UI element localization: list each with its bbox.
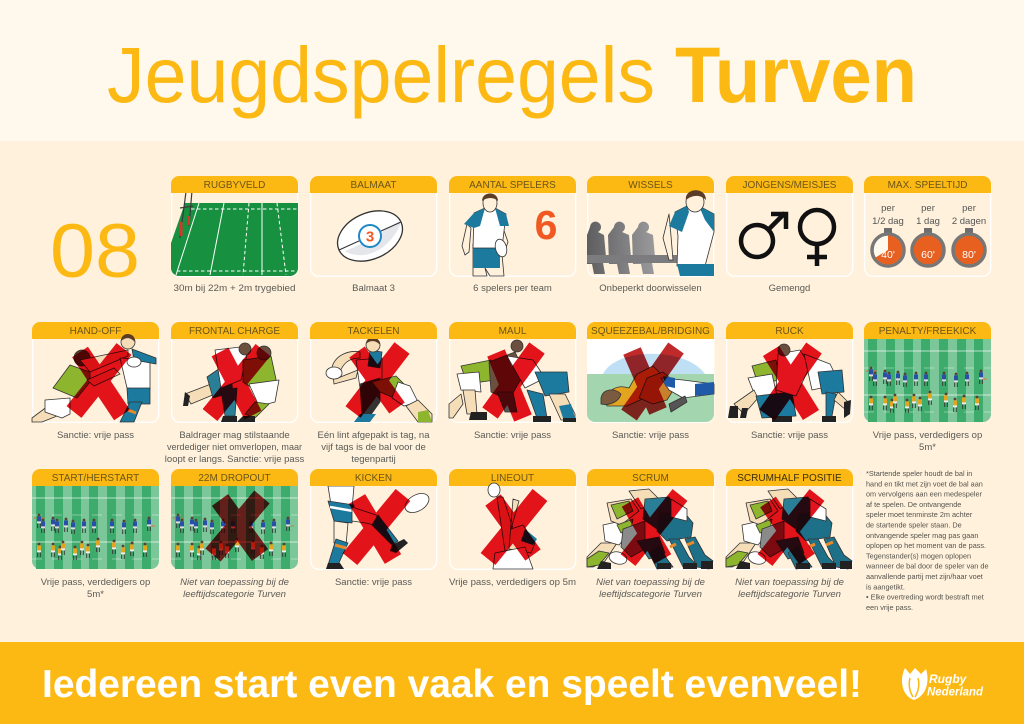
footnote text block: speler moet tenminste 2m achter [866,510,973,519]
footnote text block: oplopen op het moment van de pass. [866,541,986,550]
caption: tegenpartij [351,454,396,465]
panel: frontal charge: FRONTAL CHARGE [189,326,280,337]
caption [596,577,705,600]
player count: 6 [535,202,557,248]
panel: start/herstart [32,469,159,600]
caption: Sanctie: vrije pass [751,430,828,441]
panel: max. speeltijd: MAX. SPEELTIJD [888,180,967,191]
caption [318,430,430,465]
illustration: squeeze ball scene [587,339,714,422]
stopwatch: 80 minutes: 80' [962,249,976,261]
panel: squeezebal/bridging [587,322,714,441]
red cross [210,350,263,415]
caption: 6 spelers per team [473,283,552,294]
footnote text block [865,469,989,612]
red cross [765,495,817,560]
caption: Sanctie: vrije pass [335,577,412,588]
panel: ruck [726,322,853,441]
illustration: frontal charge players [183,343,279,422]
panel: kicken: KICKEN [355,473,392,484]
header [32,469,159,486]
stopwatch: 60 minutes: per [921,203,935,214]
caption: 30m bij 22m + 2m trygebied [174,283,296,294]
field with players [171,486,298,569]
red cross [488,495,540,559]
panel: scrum [587,469,714,600]
caption: Eén lint afgepakt is tag, na [318,430,430,441]
caption: vijf tags is de bal voor de [321,442,426,453]
panel: wissels [587,176,714,294]
footer band [0,642,1024,724]
panel: rugbyveld [171,176,298,294]
panel: 22m dropout [171,469,298,600]
icon: male symbol [741,213,786,257]
caption: Onbeperkt doorwisselen [599,283,702,294]
header [449,469,576,486]
stopwatch: 80 minutes: per [962,203,976,214]
stopwatch: 40 minutes: 40' [881,249,895,261]
caption: leeftijdscategorie Turven [599,589,702,600]
panel: tackelen [310,322,437,465]
footnote text block: *Startende speler houdt de bal in [866,469,972,478]
panel: maul: MAUL [499,326,527,337]
icon: substitutes bench and player [587,190,714,276]
age category number: 08 [50,209,140,294]
panel: aantal spelers: AANTAL SPELERS [469,180,556,191]
panel: balmaat: BALMAAT [351,180,396,191]
caption: 5m* [919,442,936,453]
illustration: ruck players [728,344,851,422]
illustration: kicking player [326,486,432,569]
stopwatch: 40 minutes: 1/2 dag [872,216,904,227]
red cross [213,497,262,555]
logo: Rugby Nederland: Rugby [929,672,968,686]
footnote text block: de startende speler staan. De [866,520,962,530]
caption [41,577,150,600]
panel: lineout [449,469,576,588]
illustration: tackle players [326,337,432,422]
icon: player with ball [462,194,509,276]
footnote text block: wanneer de bal door de speler van de [865,562,989,571]
panel: penalty/freekick: PENALTY/FREEKICK [879,326,977,337]
title: Turven [675,30,917,119]
caption: leeftijdscategorie Turven [183,589,286,600]
stopwatch: 80 minutes [952,203,986,266]
footnote text block: Tegenstander(s) mogen oplopen [866,551,971,560]
caption: Vrije pass, verdedigers op [41,577,150,588]
header [171,469,298,486]
header [587,176,714,193]
footer slogan: Iedereen start even vaak en speelt evenveel! [42,663,862,706]
header [171,176,298,193]
red cross [353,348,402,412]
caption: 5m* [87,589,104,600]
footnote text block: hand en tikt met zijn voet de bal aan [866,479,983,488]
header band [0,0,1024,141]
header [171,322,298,339]
panel: scrumhalf positie [726,469,853,600]
panel: kicken [310,469,437,588]
header [726,322,853,339]
panel: balmaat [310,176,437,294]
stopwatch: 80 minutes: 2 dagen [952,216,986,227]
red cross [350,495,403,559]
panel: maul [449,322,576,441]
caption: Niet van toepassing bij de [180,577,289,588]
stopwatch: 60 minutes [912,203,944,266]
caption: Gemengd [769,283,810,294]
panel: 22m dropout: 22M DROPOUT [198,473,271,484]
panel: squeezebal/bridging: SQUEEZEBAL/BRIDGING [591,326,710,337]
stopwatch: 40 minutes [872,203,904,266]
stopwatch: 60 minutes: 1 dag [916,216,940,227]
illustration: scrum players [587,489,713,569]
illustration: lineout players [488,483,537,569]
header [587,322,714,339]
panel: hand-off [32,322,159,441]
panel: jongens/meisjes: JONGENS/MEISJES [743,180,837,191]
panel: penalty/freekick [864,322,991,453]
red cross [767,348,814,415]
logo: Rugby Nederland: Nederland [927,684,984,698]
field illustration [171,179,298,276]
caption: Sanctie: vrije pass [612,430,689,441]
panel: frontal charge [165,322,304,465]
caption: Vrije pass, verdedigers op [873,430,982,441]
footnote text block: een vrije pass. [866,603,913,612]
illustration: hand-off players [32,334,156,422]
logo: Rugby Nederland [902,668,984,700]
panel: max. speeltijd [864,176,991,276]
caption [873,430,982,453]
icon: female symbol [800,210,834,266]
illustration: maul players [449,340,576,422]
caption: Balmaat 3 [352,283,395,294]
footnote text block: • Elke overtreding wordt bestraft met [866,593,984,602]
stopwatch: 60 minutes: 60' [921,249,935,261]
title: Jeugdspelregels [107,30,655,119]
panel: wissels: WISSELS [628,180,673,191]
caption: Sanctie: vrije pass [474,430,551,441]
footnote text block: om vervolgens aan een medespeler [866,490,983,499]
caption: Niet van toepassing bij de [735,577,844,588]
panel: scrum: SCRUM [632,473,669,484]
header [864,176,991,193]
caption [735,577,844,600]
panel: tackelen: TACKELEN [347,326,400,337]
red cross [629,348,676,415]
caption: Sanctie: vrije pass [57,430,134,441]
header [310,176,437,193]
red cross [74,349,124,415]
panel: aantal spelers [449,176,576,294]
panel: start/herstart: START/HERSTART [52,473,139,484]
stopwatch: 40 minutes: per [881,203,895,214]
footnote text block: af te spelen. De ontvangende [866,500,961,509]
caption: Baldrager mag stilstaande [179,430,290,441]
footnote text block: is aangetikt. [866,582,905,591]
panel: rugbyveld: RUGBYVELD [204,180,265,191]
panel: hand-off: HAND-OFF [70,326,121,337]
header [864,322,991,339]
caption: verdediger niet omverlopen, maar [167,442,302,453]
red cross [628,495,680,560]
red cross [490,348,537,418]
caption: leeftijdscategorie Turven [738,589,841,600]
caption: Vrije pass, verdedigers op 5m [449,577,576,588]
panel: jongens/meisjes [726,176,853,294]
icon: rugby ball size 3: 3 [366,228,374,246]
header [726,176,853,193]
caption [180,577,289,600]
header [587,469,714,486]
footnote text block: aanvallende partij met zijn/haar voet [866,572,983,581]
footnote text block: ontvangende speler mag pas gaan [866,531,978,540]
panel: lineout: LINEOUT [491,473,534,484]
field with players [864,339,991,422]
header [449,176,576,193]
header [449,322,576,339]
caption [165,430,304,465]
illustration: scrum players [726,489,852,569]
field with players [32,486,159,569]
caption: loopt er langs. Sanctie: vrije pass [165,454,304,465]
header [32,322,159,339]
caption: Niet van toepassing bij de [596,577,705,588]
header [310,322,437,339]
header [310,469,437,486]
panel: scrumhalf positie: SCRUMHALF POSITIE [737,473,842,484]
panel: ruck: RUCK [775,326,804,337]
header [726,469,853,486]
